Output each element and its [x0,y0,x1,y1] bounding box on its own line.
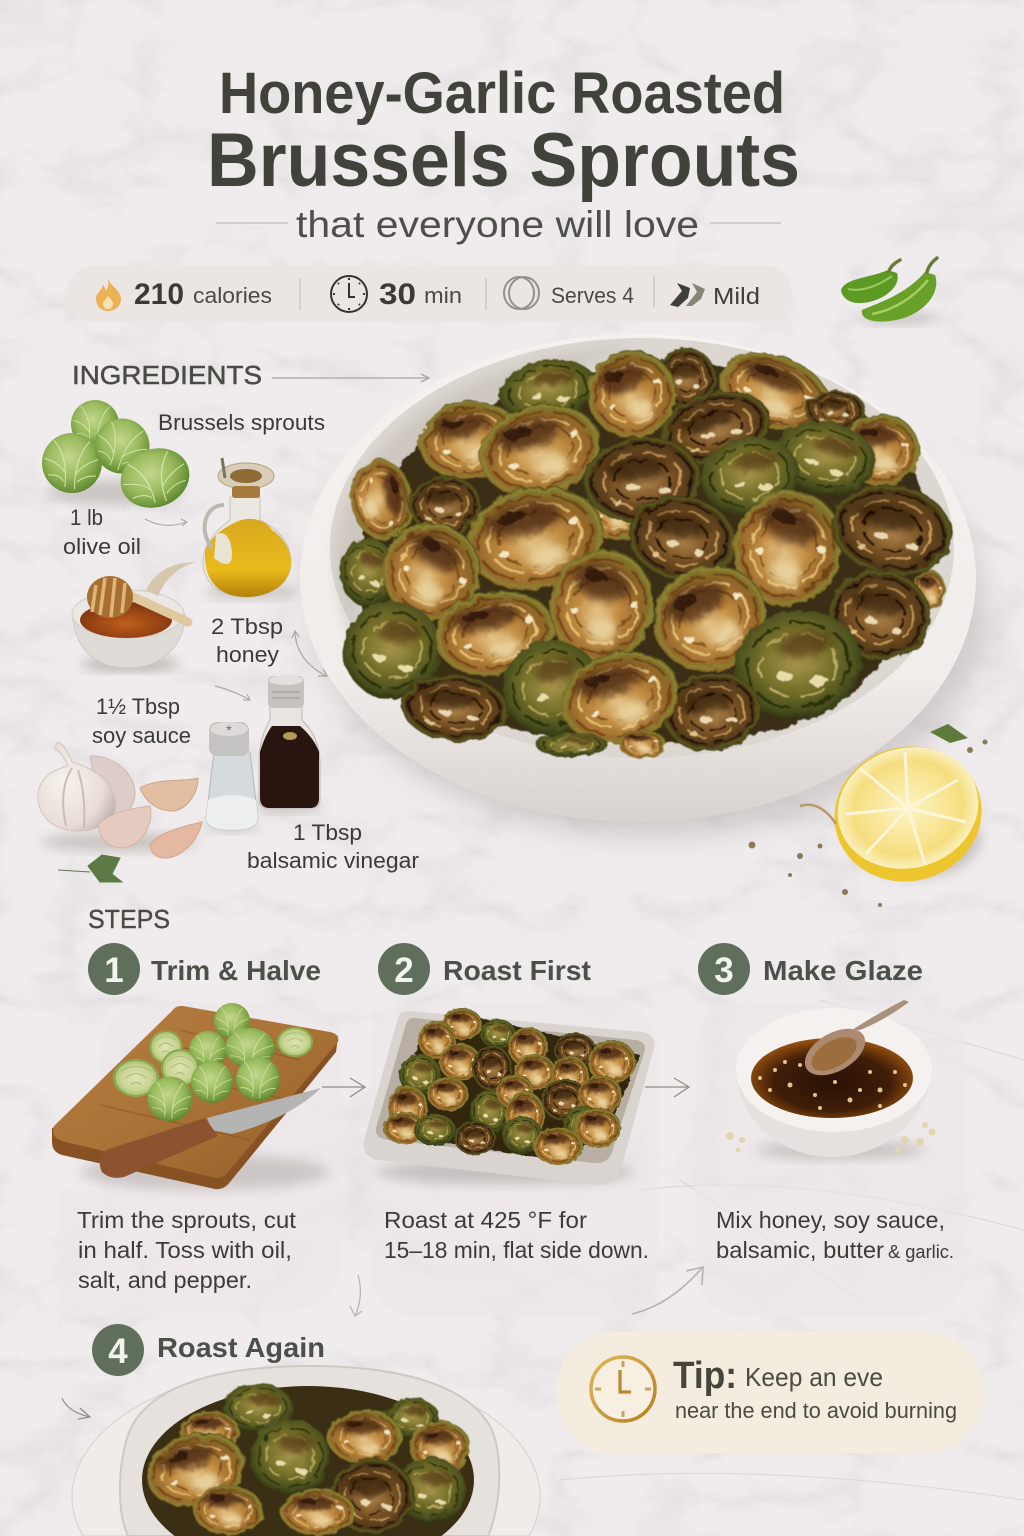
glaze bowl [726,1000,936,1159]
lemon half with herbs and spices [748,724,997,907]
step 2 text [384,1207,649,1263]
title: Brussels Sprouts [207,118,800,203]
arrow: soy sauce [215,686,250,700]
plate sprouts [138,1383,470,1535]
roasted sprouts [340,339,960,759]
panel: step 3 [696,943,966,1316]
title [207,61,800,203]
spoon [852,1000,909,1030]
label: soy sauce amount: soy sauce [92,723,191,748]
herb sprig [930,724,968,743]
panel: step 1 [52,943,342,1410]
label: 1 Tbsp balsamic vinegar: 1 Tbsp [293,820,362,845]
icon: clock [331,276,367,312]
arrow: olive oil [145,519,187,526]
stat: time: 30 [379,278,416,311]
label: 1 lb olive oil: 1 lb [70,505,103,530]
arrow: to step 4 [62,1398,90,1419]
parsley leaf [58,855,122,882]
title: Honey-Garlic Roasted [219,61,785,126]
knife [100,1088,321,1178]
callout: tip [557,1332,983,1453]
arrow: ingredients to bowl [272,374,429,382]
ingredient: salt shaker: * [226,722,232,738]
icon: serving rings [504,277,539,309]
step 4 badge: 4 [108,1332,128,1371]
stat: calories: calories [193,283,272,308]
label: Brussels sprouts: Brussels sprouts [158,410,325,435]
ingredient: balsamic bottle [256,675,324,812]
pan sprouts [383,1008,640,1165]
stat: calories [134,278,272,311]
stat: servings: Serves 4 [551,283,634,308]
icon: flame [96,279,121,311]
ingredient: garlic [38,742,202,882]
stats bar [68,266,792,322]
bowl body [300,334,976,822]
label: 1 Tbsp balsamic vinegar [247,820,420,873]
main bowl of sprouts [300,334,986,838]
ingredient: olive oil bottle [203,458,296,599]
step 2 badge: 2 [394,951,414,990]
tip text: Tip: [673,1355,737,1397]
sesame crumbs [726,1122,936,1153]
step 2 badge [378,943,430,995]
step 2 text: 15–18 min, flat side down. [384,1237,649,1263]
step 4 [72,1324,540,1536]
heading: ingredients: INGREDIENTS [72,360,262,390]
roasting pan [364,1008,654,1185]
label: 2 Tbsp honey [211,614,283,667]
step 3 badge: 3 [714,951,734,990]
step 4 heading: Roast Again [157,1332,325,1363]
arrow: step 1 to 2 [322,1078,365,1097]
ingredient: honey bowl with dipper [72,562,197,671]
step 3 text: & garlic. [888,1242,954,1262]
arrow: step 3 to 4 curve [632,1267,703,1314]
step 3 badge [698,943,750,995]
step 3 text [716,1207,954,1263]
icon: green peppers [841,258,938,324]
stat: time: min [424,283,462,308]
step 3 heading: Make Glaze [763,955,923,986]
label: 1 Tbsp balsamic vinegar: balsamic vinegar [247,848,420,873]
arrow: step down [350,1275,362,1316]
step 4 badge [92,1324,144,1376]
label: soy sauce amount: 1½ Tbsp [96,694,180,719]
step 1 text [77,1207,296,1293]
step 1 badge: 1 [104,951,124,990]
label: 1 lb olive oil [63,505,141,559]
step 1 text: in half. Toss with oil, [78,1237,292,1263]
step 1 text: Trim the sprouts, cut [77,1207,296,1233]
tip text: Keep an eve [745,1362,883,1392]
step 4 plate [72,1366,540,1536]
label: 1 lb olive oil: olive oil [63,534,141,559]
label: 2 Tbsp honey: 2 Tbsp [211,614,283,639]
spice scatter [748,740,988,907]
ingredient: salt shaker [204,722,260,832]
arrow: step 2 to 3 [645,1078,689,1097]
ingredient: raw brussels sprouts [42,400,198,517]
label: 2 Tbsp honey: honey [216,642,280,667]
step 1 badge [88,943,140,995]
halved sprouts [113,1003,313,1122]
panel: step 2 [364,943,658,1316]
garlic cloves [140,778,198,811]
step 3 text: balsamic, butter [716,1237,884,1263]
step 3 text: Mix honey, soy sauce, [716,1207,945,1233]
tip text [673,1355,957,1423]
stat: heat: Mild [713,283,760,309]
step 2 text: Roast at 425 °F for [384,1207,587,1233]
cutting board [52,1006,338,1190]
icon: mild peppers [670,283,705,307]
step 1 heading: Trim & Halve [151,955,321,986]
tip text: near the end to avoid burning [675,1398,957,1423]
subtitle: that everyone will love [296,204,699,245]
step 1 text: salt, and pepper. [78,1267,252,1293]
heading: steps: STEPS [88,904,170,934]
bowl interior [330,338,954,758]
label: soy sauce amount [92,694,191,748]
step 2 heading: Roast First [443,955,591,986]
icon: gold clock [591,1357,655,1421]
stat: time [379,278,462,311]
heading: ingredients [72,360,429,390]
arrow: honey to bowl [292,631,327,676]
stat: calories: 210 [134,278,184,311]
